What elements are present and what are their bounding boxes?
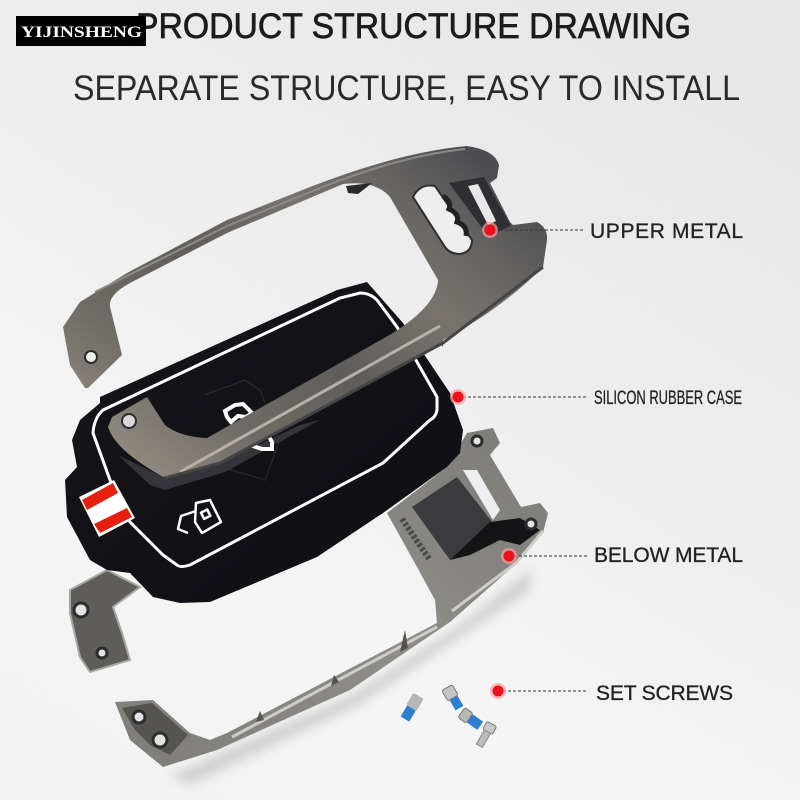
bright rim of below metal xyxy=(232,531,543,737)
callout: upper metal xyxy=(482,220,743,243)
subtitle: SEPARATE STRUCTURE, EASY TO INSTALL xyxy=(73,69,740,108)
stripe red top xyxy=(82,483,118,510)
part: below metal frame xyxy=(70,428,548,785)
callout: set screws xyxy=(490,682,733,705)
callout: silicon rubber case xyxy=(450,388,742,409)
scalloped grip edge xyxy=(443,196,466,236)
icon: unlock padlock xyxy=(178,500,221,533)
callout: upper metal: UPPER METAL xyxy=(590,220,743,243)
metal shadow on rubber xyxy=(118,420,320,490)
screw post holes xyxy=(74,436,536,747)
key ring slot xyxy=(449,177,511,236)
dark end interior of below metal xyxy=(122,703,188,755)
highlight along upper arm xyxy=(95,149,465,292)
title: PRODUCT STRUCTURE DRAWING xyxy=(136,7,691,46)
white outline on rubber xyxy=(93,293,437,566)
icon: boot lid bottom xyxy=(251,433,272,449)
key ring slot opening xyxy=(468,184,496,225)
small pins xyxy=(256,630,408,722)
callout: below metal xyxy=(501,544,743,567)
part: set screws xyxy=(400,685,497,748)
highlight along lower arm xyxy=(180,326,440,472)
callout: set screws: SET SCREWS xyxy=(596,682,733,705)
black clip xyxy=(450,518,540,560)
finger grip slot xyxy=(413,185,472,254)
part: silicon rubber case xyxy=(65,282,463,603)
stripe white frame xyxy=(79,480,135,537)
window in below metal xyxy=(463,470,500,520)
screw 4 xyxy=(475,721,497,748)
screw 3 xyxy=(458,708,484,731)
stripe red bottom xyxy=(94,508,132,533)
inner clip under upper arm xyxy=(346,183,372,194)
screw 1 xyxy=(400,693,424,722)
dark rim on lower arm xyxy=(165,267,543,478)
icon: boot lid top xyxy=(225,404,252,422)
engraved logo strip xyxy=(402,519,430,560)
brand badge: YIJINSHENG xyxy=(21,24,142,41)
exploded key case xyxy=(63,146,548,785)
callout: below metal: BELOW METAL xyxy=(594,544,743,567)
screw 2 xyxy=(442,685,464,711)
main body of below metal xyxy=(115,428,548,767)
brand badge xyxy=(16,16,146,46)
upper screw hole xyxy=(85,351,97,363)
left lug of below metal xyxy=(70,570,140,672)
carbon panel xyxy=(412,477,493,560)
button seams xyxy=(205,380,280,480)
part: upper metal frame xyxy=(63,146,547,478)
lower screw hole xyxy=(122,414,136,428)
